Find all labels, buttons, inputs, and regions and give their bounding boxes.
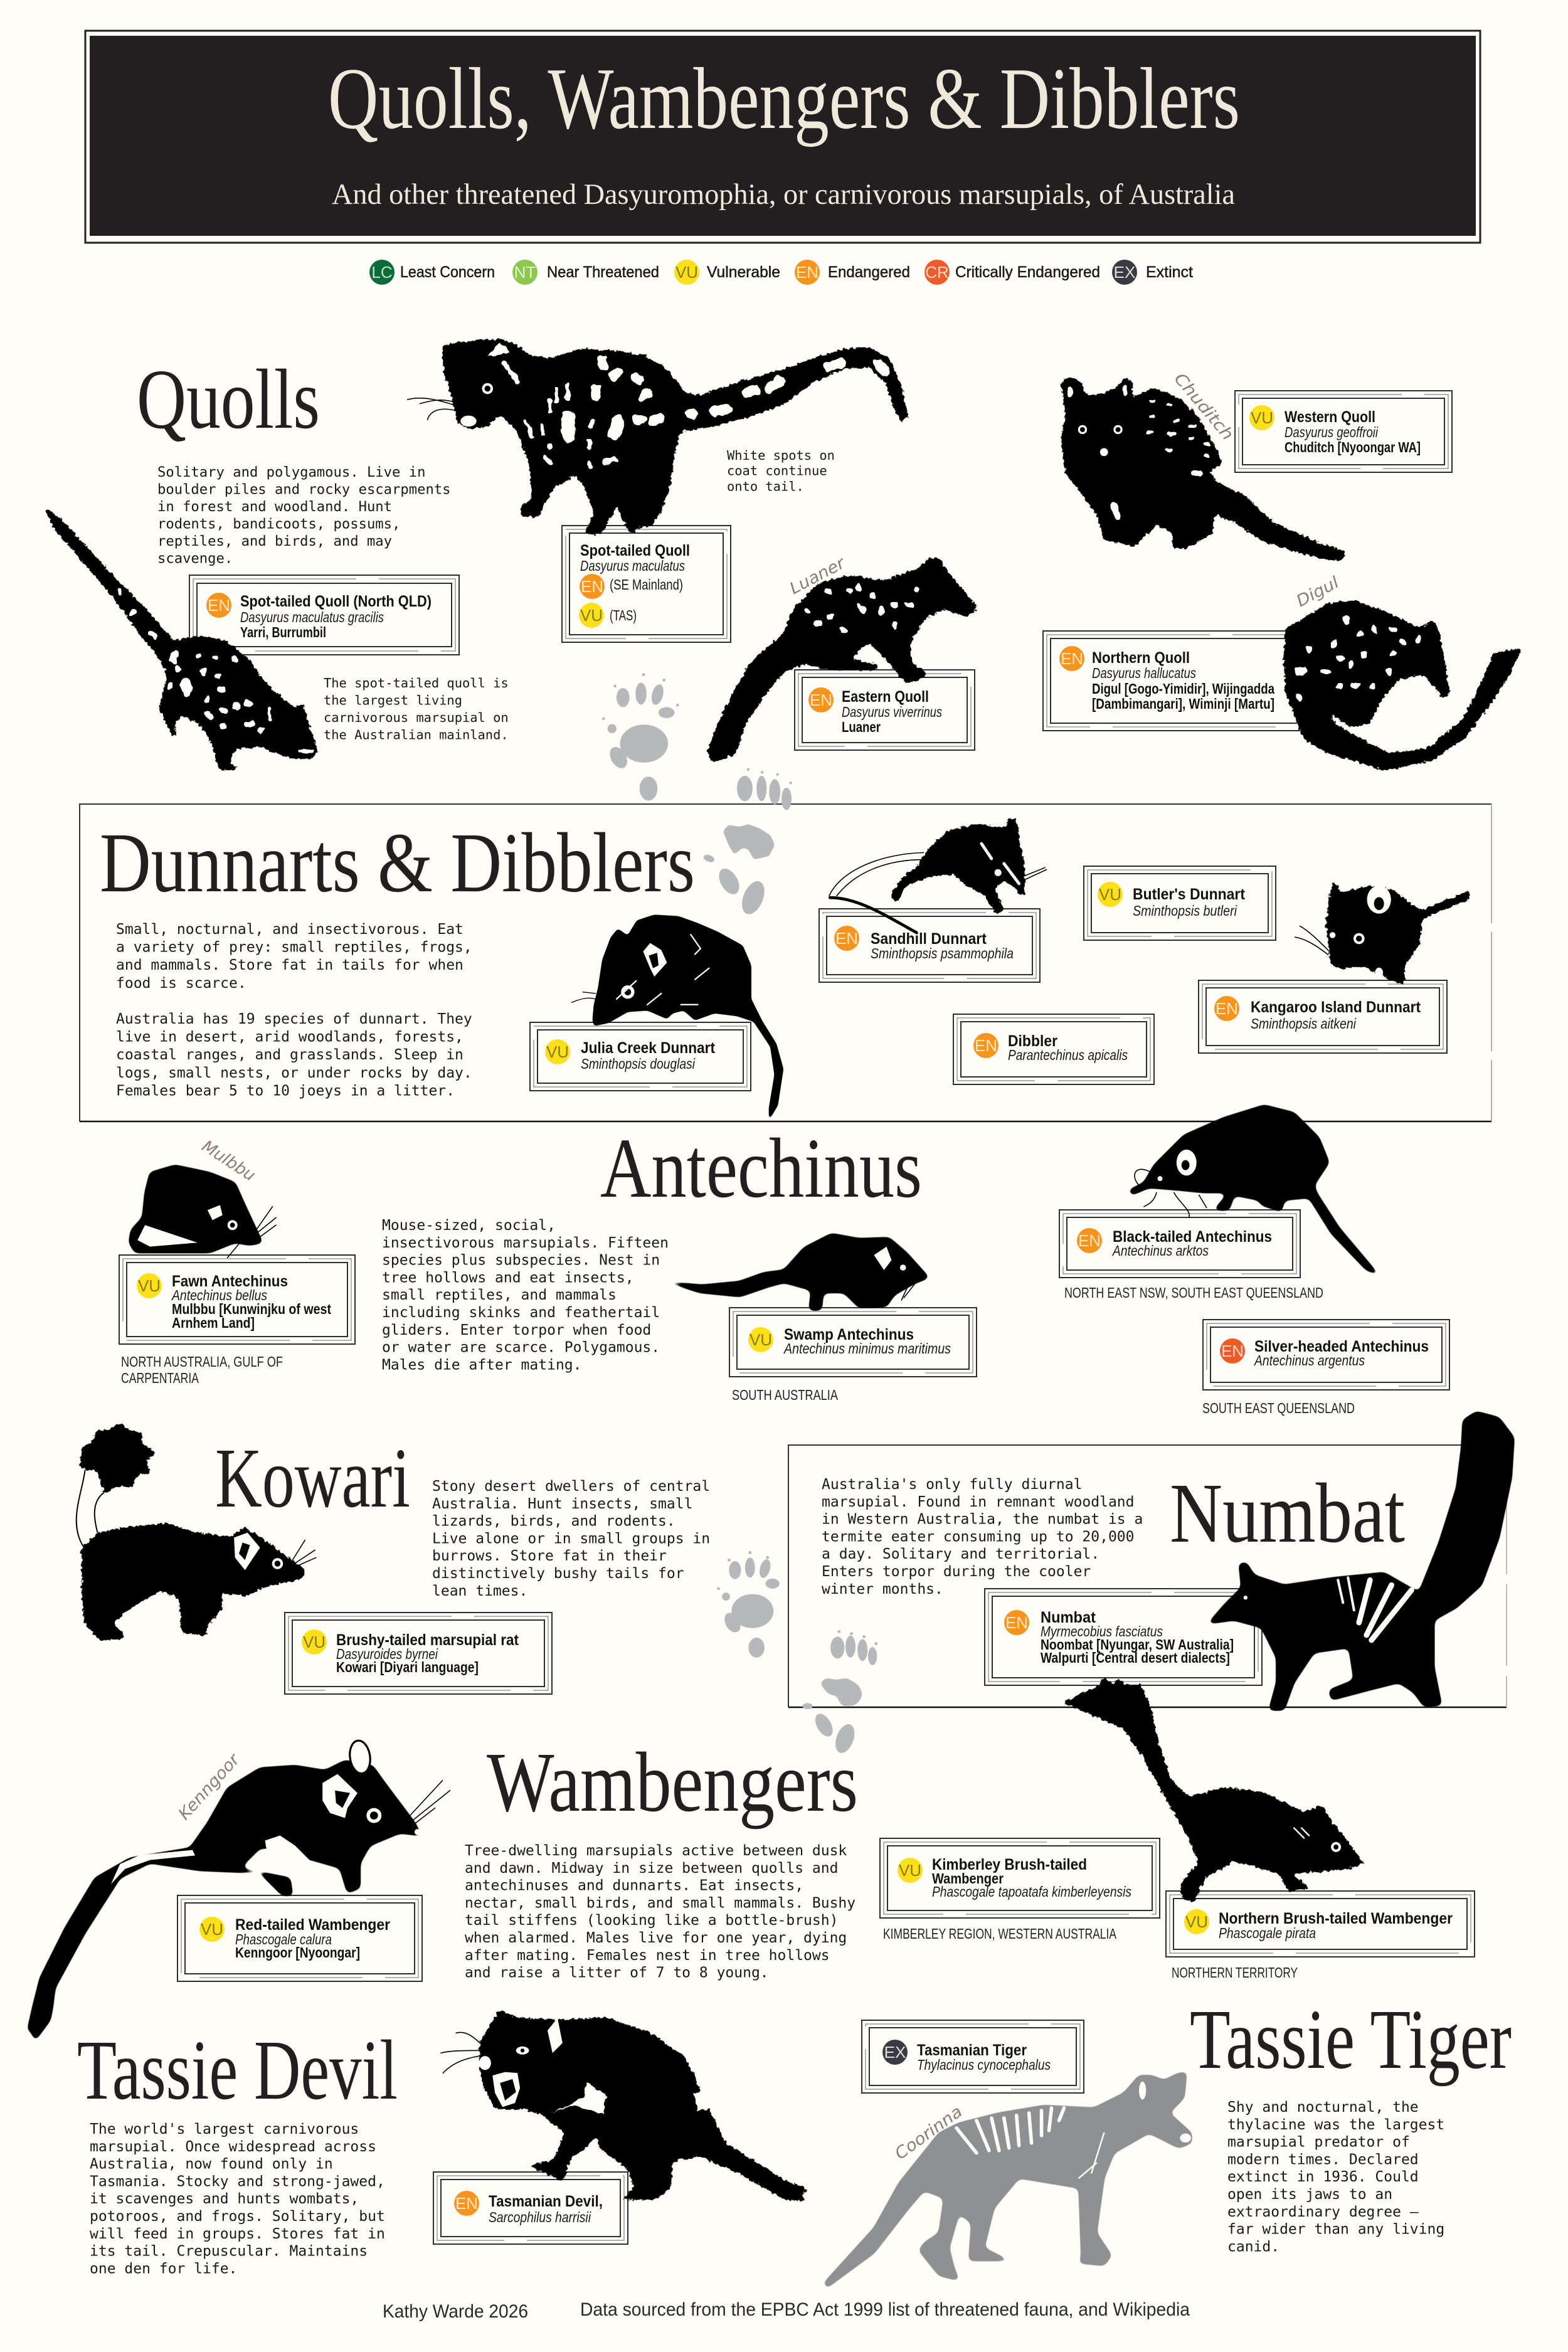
label: Butler's Dunnart: VU [1099,885,1121,904]
text: tassie tiger description: open its jaws to an [1227,2186,1392,2203]
title banner [85,31,1480,243]
label: Tasmanian Devil: EN [455,2194,478,2213]
label: Eastern Quoll: EN [810,691,832,709]
legend: Near Threatened [547,263,659,281]
text: wambengers description: nectar, small birds, and small mammals. Bushy [465,1895,856,1911]
label: Black-tailed Antechinus: EN [1078,1231,1101,1250]
label: Dibbler: Dibbler [1008,1032,1057,1050]
animal: Black-tailed Antechinus [1129,1105,1379,1275]
label: Numbat: Myrmecobius fasciatus [1041,1623,1163,1640]
label: Brushy-tailed marsupial rat: Kowari [Diyari language] [336,1659,479,1675]
text: largest quoll note: carnivorous marsupial on [324,710,509,725]
text: tassie tiger description: marsupial predator of [1227,2134,1410,2151]
paw prints: numbat [802,1630,877,1756]
heading: Antechinus: Antechinus [600,1121,922,1216]
text: numbat description: in Western Australia, the numbat is a [822,1512,1143,1528]
text: numbat description: winter months. [822,1581,943,1597]
handwritten name: Luaner: Luaner [787,553,849,598]
text: white spots note: onto tail. [727,479,804,494]
legend [369,260,1193,285]
label: Northern Quoll [1043,631,1305,731]
text: antechinus description: Mouse-sized, social, [382,1217,556,1234]
text: wambengers description: when alarmed. Males live for one year, dying [465,1930,847,1946]
text: quolls description: scavenge. [157,551,233,567]
text: tassie devil description: The world's largest carnivorous [90,2121,359,2137]
label: Fawn Antechinus: Arnhem Land] [172,1315,255,1331]
legend: EN [796,263,818,282]
legend: Extinct [1146,263,1193,281]
handwritten name: Digul: Digul [1293,573,1343,611]
text: white spots note: coat continue [727,464,827,479]
heading: Numbat: Numbat [1170,1466,1405,1560]
heading: Dunnarts & Dibblers: Dunnarts & Dibblers [100,816,695,910]
animal: Kangaroo Island Dunnart [1295,881,1469,983]
legend: NT [514,263,536,282]
paw prints: quoll [602,673,679,800]
label: Western Quoll [1235,391,1452,472]
text: kowari description: burrows. Store fat in their [432,1548,667,1564]
label: Tasmanian Devil [433,2172,628,2244]
text: white spots note: White spots on [727,448,835,463]
text: wambengers description: antechinuses and dunnarts. Eat insects, [465,1878,803,1894]
text: tassie devil description: Tasmania. Stocky and strong-jawed, [90,2173,385,2190]
text: dunnarts description: and mammals. Store fat in tails for when [116,957,464,973]
text: antechinus description: Males die after mating. [382,1357,582,1373]
text: tassie devil description: marsupial. Once widespread across [90,2139,376,2155]
text: wambengers description: after mating. Females nest in tree hollows [465,1947,830,1964]
text: dunnarts description: logs, small nests, or under rocks by day. [116,1065,472,1081]
text: kowari description: Live alone or in small groups in [432,1530,710,1547]
text: tassie tiger description: extinct in 1936. Could [1227,2169,1419,2185]
label: Fawn Antechinus: Mulbbu [Kunwinjku of west [172,1301,331,1317]
label: Dibbler: EN [975,1036,997,1055]
text: tassie tiger description: Shy and nocturnal, the [1227,2099,1419,2116]
text: tassie devil description: Australia, now found only in [90,2156,333,2173]
text: tassie devil description: potoroos, and frogs. Solitary, but [90,2208,385,2225]
label: Spot-tailed Quoll North QLD: Dasyurus maculatus gracilis [240,609,384,625]
animal: Eastern Quoll [707,559,978,762]
label: Kimberley Brush-tailed Wambenger: VU [899,1861,921,1880]
label: Sandhill Dunnart [819,909,1040,982]
text: tassie tiger description: extraordinary degree – [1227,2204,1419,2220]
text: quolls description: reptiles, and birds, and may [157,533,392,549]
label: Sandhill Dunnart: EN [835,929,858,948]
text: antechinus description: insectivorous marsupials. Fifteen [382,1235,669,1251]
text: numbat description: Australia's only fully diurnal [822,1476,1082,1493]
label: Black-tailed Antechinus [1059,1210,1300,1278]
label: Spot-tailed Quoll North QLD [189,575,459,655]
text: antechinus description: species plus subspecies. Nest in [382,1253,660,1269]
text: largest quoll note: The spot-tailed quoll is [324,675,509,691]
label: Spot-tailed Quoll: EN [581,577,603,596]
text: tassie tiger description: thylacine was the largest [1227,2117,1444,2133]
label: Eastern Quoll [795,670,975,750]
panel: numbat frame [788,1445,1507,1707]
text: kowari description: lizards, birds, and rodents. [432,1513,675,1530]
label: Kimberley Brush-tailed Wambenger: Phascogale tapoatafa kimberleyensis [932,1883,1131,1900]
label: Kimberley Brush-tailed Wambenger: Kimberley Brush-tailed [932,1856,1087,1873]
text: antechinus description: gliders. Enter torpor when food [382,1322,651,1338]
text: dunnarts description: Small, nocturnal, and insectivorous. Eat [116,921,464,938]
label: Brushy-tailed marsupial rat: Dasyuroides byrnei [336,1646,438,1662]
handwritten name: Kenngoor: Kenngoor [175,1749,245,1824]
text: tassie tiger description: modern times. Declared [1227,2151,1419,2168]
animal: Fawn Antechinus [129,1165,276,1258]
label: Black-tailed Antechinus: Black-tailed Antechinus [1113,1228,1272,1246]
panel: dunnarts frame [80,804,1491,1121]
label: Silver-headed Antechinus: Antechinus argentus [1253,1352,1365,1369]
text: tassie devil description: will feed in groups. Stores fat in [90,2226,385,2242]
text: antechinus description: tree hollows and eat insects, [382,1269,634,1286]
text: quolls description: rodents, bandicoots, possums, [157,516,400,532]
text: numbat description: a day. Solitary and territorial. [822,1546,1099,1562]
label: Eastern Quoll: Eastern Quoll [842,688,929,706]
label: Fawn Antechinus: VU [138,1276,161,1295]
label: Northern Quoll: EN [1061,649,1083,668]
legend: Critically Endangered [955,263,1100,281]
title: Quolls, Wambengers & Dibblers [328,50,1240,147]
text: wambengers description: tail stiffens (looking like a bottle-brush) [465,1912,838,1929]
label: Julia Creek Dunnart: Julia Creek Dunnart [581,1039,716,1057]
label: Kangaroo Island Dunnart: Kangaroo Island Dunnart [1251,999,1421,1016]
label: Eastern Quoll: Luaner [842,719,881,735]
credit: Kathy Warde 2026 [383,2301,528,2322]
label: Brushy-tailed marsupial rat [285,1613,552,1694]
paw prints: kowari [717,1551,780,1658]
label: Dibbler [953,1014,1154,1084]
handwritten name: Mulbbu: Mulbbu [198,1137,258,1185]
label: Kangaroo Island Dunnart [1199,980,1447,1053]
heading: Wambengers: Wambengers [487,1735,858,1830]
text: kowari description: Stony desert dwellers of central [432,1478,710,1495]
label: Northern Brush-tailed Wambenger: VU [1185,1912,1208,1931]
text: kowari description: lean times. [432,1583,527,1599]
label: Black-tailed Antechinus: Antechinus arktos [1111,1242,1209,1259]
label: Numbat: EN [1005,1613,1028,1632]
legend: Vulnerable [707,263,780,281]
label: Western Quoll: VU [1251,408,1273,427]
animal: Swamp Antechinus [665,1234,929,1310]
text: antechinus description: or water are scarce. Polygamous. [382,1340,660,1356]
label: Spot-tailed Quoll [562,526,731,642]
text: quolls description: boulder piles and rocky escarpments [157,482,451,498]
label: Numbat: Walpurti [Central desert dialects] [1041,1650,1230,1666]
label: Spot-tailed Quoll North QLD: Yarri, Burrumbil [240,624,326,640]
label: Red-tailed Wambenger: Kenngoor [Nyoongar] [235,1944,360,1961]
label: Julia Creek Dunnart: VU [546,1042,569,1061]
region: Silver-headed Antechinus: SOUTH EAST QUEENSLAND [1202,1400,1355,1416]
label: Numbat [985,1589,1262,1685]
text: numbat description: termite eater consuming up to 20,000 [822,1528,1134,1545]
label: Butler's Dunnart: Butler's Dunnart [1133,886,1246,903]
text: wambengers description: Tree-dwelling marsupials active between dusk [465,1843,847,1859]
label: Tasmanian Devil: Tasmanian Devil, [489,2193,603,2210]
label: Western Quoll: Chuditch [Nyoongar WA] [1285,439,1421,455]
legend: Endangered [828,263,910,281]
label: Red-tailed Wambenger: VU [201,1920,223,1939]
label: Spot-tailed Quoll North QLD: Spot-tailed Quoll (North QLD) [240,593,432,610]
label: Northern Quoll: Dasyurus hallucatus [1092,665,1196,681]
label: Dibbler: Parantechinus apicalis [1008,1047,1128,1063]
label: Red-tailed Wambenger: Phascogale calura [235,1931,332,1947]
label: Northern Brush-tailed Wambenger [1166,1891,1475,1957]
label: Spot-tailed Quoll: (SE Mainland) [610,576,683,593]
animal: Julia Creek Dunnart [572,915,783,1120]
text: kowari description: Australia. Hunt insects, small [432,1496,692,1512]
label: Red-tailed Wambenger [177,1895,422,1981]
region: Black-tailed Antechinus: NORTH EAST NSW, SOUTH EAST QUEENSLAND [1064,1285,1323,1301]
heading: Kowari: Kowari [215,1431,410,1525]
label: Spot-tailed Quoll: Spot-tailed Quoll [580,542,690,559]
animal: Northern Brush-tailed Wambenger [1063,1677,1363,1902]
label: Sandhill Dunnart: Sminthopsis psammophila [871,945,1014,961]
label: Swamp Antechinus: VU [750,1330,772,1349]
animal: Numbat [1208,1412,1514,1710]
animal: Spot-tailed Quoll [408,339,908,534]
label: Northern Quoll: [Dambimangari], Wiminji [Martu] [1092,696,1274,712]
label: Tasmanian Tiger: Thylacinus cynocephalus [917,2057,1051,2073]
text: wambengers description: and dawn. Midway in size between quolls and [465,1860,838,1877]
label: Northern Quoll: Northern Quoll [1092,649,1190,667]
region: Fawn Antechinus [121,1353,283,1386]
label: Swamp Antechinus [729,1308,977,1377]
text: kowari description: distinctively bushy tails for [432,1565,684,1582]
text: dunnarts description: food is scarce. [116,975,246,992]
text: tassie devil description: it scavenges and hunts wombats, [90,2191,359,2207]
subtitle: And other threatened Dasyuromophia, or carnivorous marsupials, of Australia [332,178,1235,211]
text: antechinus description: small reptiles, and mammals [382,1287,617,1303]
text: tassie tiger description: far wider than any living [1227,2222,1444,2238]
label: Northern Brush-tailed Wambenger: Northern Brush-tailed Wambenger [1219,1910,1453,1927]
animal: Kowari [77,1424,316,1640]
text: numbat description: marsupial. Found in remnant woodland [822,1494,1134,1510]
text: tassie devil description: its tail. Crepuscular. Maintains [90,2243,368,2260]
label: Butler's Dunnart: Sminthopsis butleri [1133,903,1237,919]
label: Western Quoll: Western Quoll [1285,408,1375,426]
label: Julia Creek Dunnart [530,1022,751,1091]
text: numbat description: Enters torpor during the cooler [822,1564,1091,1580]
label: Spot-tailed Quoll: Dasyurus maculatus [580,558,685,574]
label: Spot-tailed Quoll North QLD: EN [208,596,230,615]
label: Swamp Antechinus: Antechinus minimus maritimus [783,1340,951,1357]
text: tassie devil description: one den for life. [90,2260,237,2277]
animal: Red-tailed Wambenger [28,1739,450,2040]
animal: Tasmanian Devil [441,2011,809,2200]
animal: Western Quoll [1061,378,1347,561]
label: Kimberley Brush-tailed Wambenger: Wambenger [932,1870,1004,1887]
label: Eastern Quoll: Dasyurus viverrinus [842,704,942,720]
label: Kimberley Brush-tailed Wambenger [880,1838,1160,1918]
text: quolls description: in forest and woodland. Hunt [157,499,392,515]
label: Tasmanian Tiger [862,2020,1084,2093]
label: Sandhill Dunnart: Sandhill Dunnart [871,930,987,948]
label: Butler's Dunnart [1084,866,1276,940]
legend: VU [675,263,698,282]
text: largest quoll note: the largest living [324,692,462,707]
region: Fawn Antechinus: CARPENTARIA [121,1370,199,1386]
label: Tasmanian Tiger: EX [884,2043,906,2062]
text: largest quoll note: the Australian mainland. [324,728,509,743]
label: Fawn Antechinus [119,1255,355,1344]
label: Brushy-tailed marsupial rat: VU [303,1633,326,1651]
region: Swamp Antechinus: SOUTH AUSTRALIA [732,1387,839,1403]
legend: EX [1114,263,1135,282]
text: tassie tiger description: canid. [1227,2238,1279,2255]
label: Tasmanian Tiger: Tasmanian Tiger [917,2042,1027,2059]
heading: Tassie Devil: Tassie Devil [77,2023,398,2117]
animal: Sandhill Dunnart [829,818,1047,933]
legend: LC [371,263,393,282]
label: Red-tailed Wambenger: Red-tailed Wambenger [235,1916,390,1934]
animal: Tasmanian Tiger [824,2072,1192,2288]
label: Kangaroo Island Dunnart: EN [1216,999,1238,1018]
heading: Quolls: Quolls [137,352,320,447]
paw prints: dunnart [702,768,792,918]
label: Numbat: Numbat [1041,1609,1096,1626]
handwritten name: Chuditch: Chuditch [1170,369,1237,444]
label: Northern Quoll: Digul [Gogo-Yimidir], Wijingadda [1092,681,1274,697]
text: dunnarts description: coastal ranges, and grasslands. Sleep in [116,1047,464,1063]
legend: Least Concern [400,263,495,281]
label: Western Quoll: Dasyurus geoffroii [1285,424,1379,440]
label: Spot-tailed Quoll: VU [580,606,603,625]
animal: Spot-tailed Quoll North QLD [45,507,317,770]
label: Northern Brush-tailed Wambenger: Phascogale pirata [1219,1925,1316,1941]
text: quolls description: Solitary and polygamous. Live in [157,464,425,480]
label: Fawn Antechinus: Antechinus bellus [171,1287,267,1303]
legend: CR [925,263,949,282]
text: dunnarts description: live in desert, arid woodlands, forests, [116,1029,464,1046]
label: Kangaroo Island Dunnart: Sminthopsis aitkeni [1251,1015,1357,1032]
label: Tasmanian Devil: Sarcophilus harrisii [489,2209,591,2225]
label: Silver-headed Antechinus: Silver-headed Antechinus [1254,1338,1429,1355]
label: Brushy-tailed marsupial rat: Brushy-tailed marsupial rat [336,1631,519,1649]
region: Kimberley: KIMBERLEY REGION, WESTERN AUSTRALIA [883,1926,1116,1942]
text: wambengers description: and raise a litter of 7 to 8 young. [465,1965,769,1981]
text: antechinus description: including skinks and feathertail [382,1305,660,1321]
animal: Northern Quoll [1284,601,1522,770]
region: Fawn Antechinus: NORTH AUSTRALIA, GULF OF [121,1353,283,1370]
label: Spot-tailed Quoll: (TAS) [610,607,637,623]
handwritten name: Coorinna: Coorinna [891,2102,966,2164]
text: dunnarts description: a variety of prey: small reptiles, frogs, [116,940,472,956]
data source: Data sourced from the EPBC Act 1999 list of threatened fauna, and Wikipedia [580,2299,1190,2320]
label: Julia Creek Dunnart: Sminthopsis douglasi [581,1056,696,1072]
label: Fawn Antechinus: Fawn Antechinus [172,1273,288,1290]
text: dunnarts description: Females bear 5 to 10 joeys in a litter. [116,1083,455,1099]
region: Northern Territory: NORTHERN TERRITORY [1172,1964,1298,1981]
text: dunnarts description: Australia has 19 species of dunnart. They [116,1011,472,1027]
label: Swamp Antechinus: Swamp Antechinus [784,1326,914,1343]
label: Silver-headed Antechinus: EN [1221,1342,1244,1360]
label: Numbat: Noombat [Nyungar, SW Australia] [1041,1636,1234,1653]
label: Silver-headed Antechinus [1203,1320,1449,1390]
